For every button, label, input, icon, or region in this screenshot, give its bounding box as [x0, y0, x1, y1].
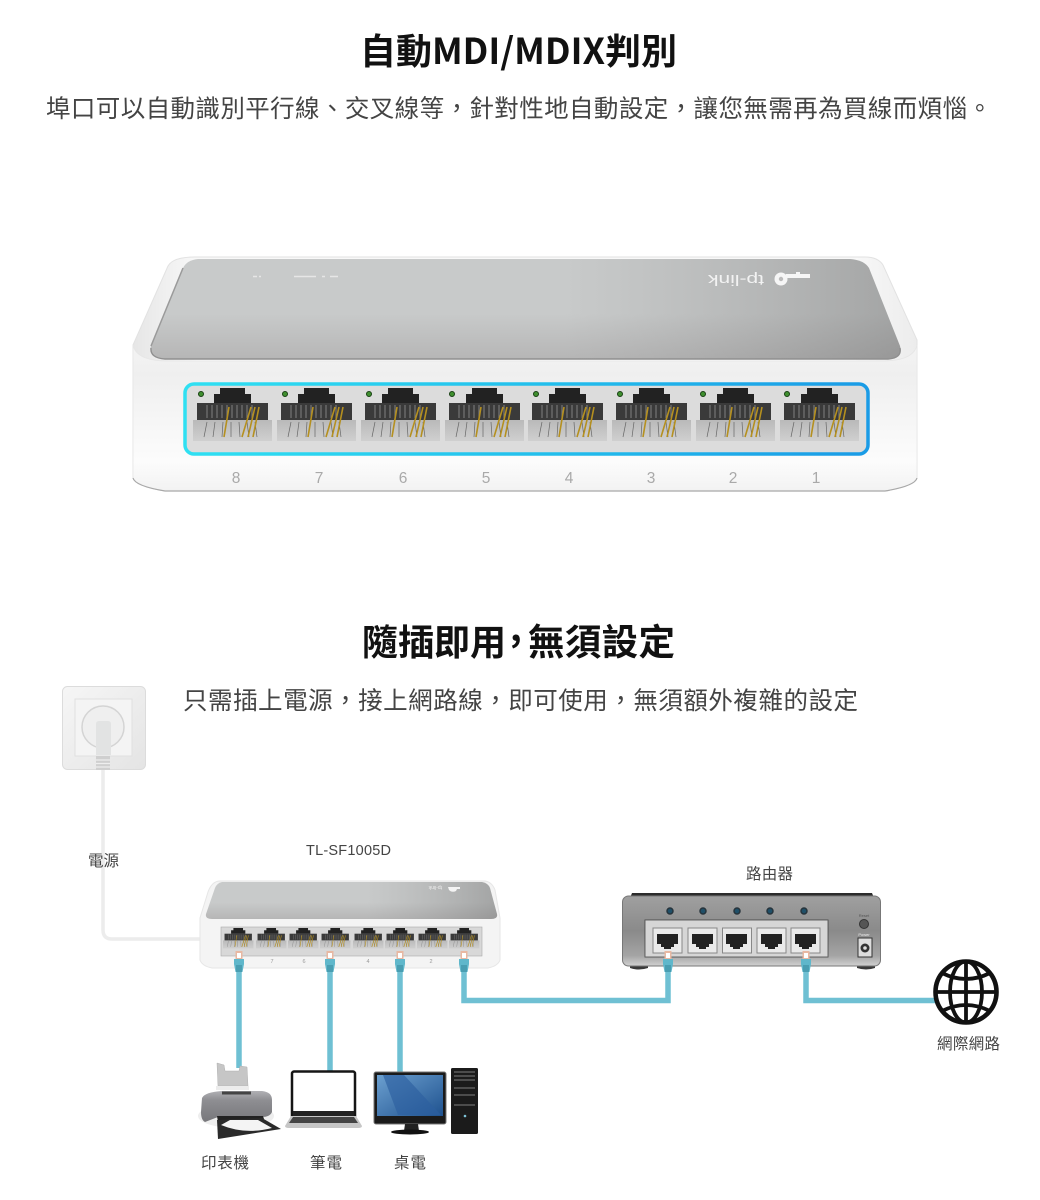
label: power: 電源	[88, 849, 119, 871]
small switch port numbers: 6	[302, 959, 306, 965]
label: laptop: 筆電	[310, 1151, 342, 1173]
title: plug and play: ,	[510, 600, 522, 652]
highlighted port frame	[185, 384, 868, 454]
large 8-port switch	[133, 257, 917, 491]
small switch port numbers: 2	[429, 959, 433, 965]
label: internet: 網際網路	[937, 1032, 1000, 1054]
small switch ports	[223, 928, 479, 948]
ports 8 to 1	[193, 388, 859, 441]
label: model name: TL-SF1005D	[306, 843, 391, 859]
title: plug and play: 無須設定	[528, 613, 675, 666]
title: plug and play: 隨插即用	[362, 614, 506, 666]
router ports	[653, 928, 820, 953]
icon: wall socket and plug	[62, 686, 146, 770]
router LEDs	[667, 908, 807, 914]
top plate	[151, 259, 901, 359]
port numbers: 1	[812, 470, 820, 487]
router	[622, 893, 880, 970]
title: MDI/MDIX: 自動MDI/MDIX判別	[360, 23, 677, 75]
front panel	[133, 345, 917, 491]
router top edge	[630, 893, 874, 898]
label: desktop: 桌電	[394, 1151, 426, 1173]
small switch	[200, 881, 500, 968]
switch body	[133, 257, 917, 491]
logo: tp-link: tp-link	[707, 271, 764, 287]
icon: desktop monitor	[374, 1072, 446, 1134]
cable connectors	[234, 951, 811, 972]
port numbers: 2	[729, 470, 737, 487]
router reset and power sockets: Power	[858, 932, 870, 937]
router body	[622, 896, 880, 966]
icon: desktop tower	[451, 1068, 478, 1134]
small switch port numbers: 7	[270, 959, 274, 965]
network cables	[239, 968, 938, 1073]
small switch port numbers	[270, 959, 433, 965]
port numbers: 7	[315, 470, 323, 487]
subtitle: MDI/MDIX description: 埠口可以自動識別平行線、交叉線等，針對性地自動設定，讓您無需再為買線而煩惱。	[46, 90, 992, 125]
port numbers	[232, 470, 820, 487]
port numbers: 6	[399, 470, 407, 487]
icon: printer	[198, 1063, 281, 1139]
title: plug and play	[362, 600, 675, 666]
small switch port strip	[221, 927, 482, 956]
port numbers: 8	[232, 470, 240, 487]
subtitle: plug and play description: 只需插上電源，接上網路線，即可使用，無須額外複雜的設定	[183, 682, 858, 717]
small switch top plate	[206, 882, 497, 919]
label: router: 路由器	[746, 862, 793, 884]
small switch logo: tp-link	[428, 884, 442, 890]
port numbers: 5	[482, 470, 490, 487]
small switch logo	[428, 884, 460, 892]
port numbers: 3	[647, 470, 655, 487]
router feet	[630, 965, 875, 970]
port numbers: 4	[565, 470, 574, 487]
router port panel	[645, 920, 828, 957]
router reset and power sockets: Reset	[859, 913, 870, 918]
small top markings	[253, 276, 338, 278]
label: printer: 印表機	[201, 1151, 249, 1173]
icon: globe	[936, 962, 996, 1022]
small switch port numbers: 4	[366, 959, 370, 965]
router reset and power sockets	[858, 913, 872, 957]
logo: tp-link	[707, 271, 810, 287]
icon: laptop	[285, 1072, 362, 1128]
power cable	[103, 770, 202, 939]
